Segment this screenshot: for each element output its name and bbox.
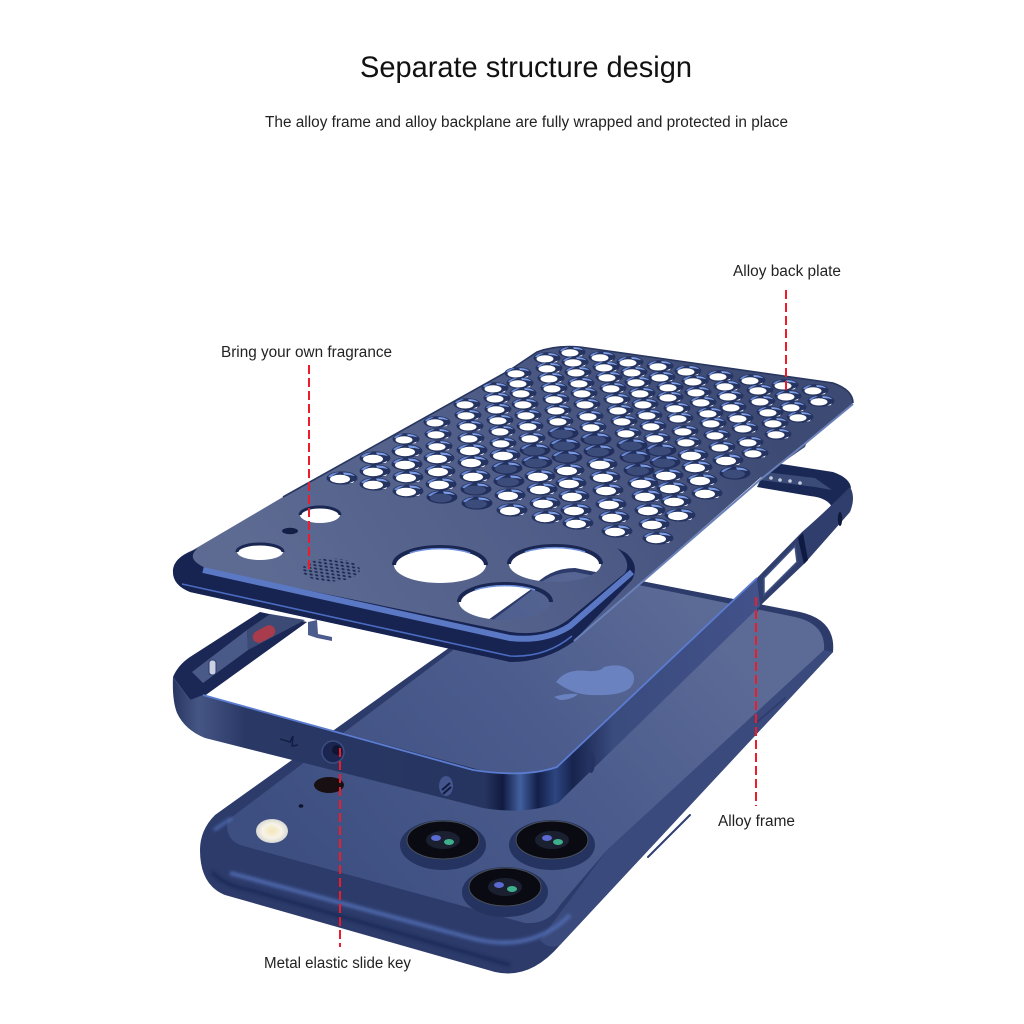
red mute button [251,623,277,645]
frame slot opening [764,546,797,595]
fragrance mesh [302,558,360,582]
frame etched mark [280,736,298,746]
frame left inner wall [173,612,307,700]
camera hole rims [394,546,601,602]
phone side buttons [648,658,785,857]
frame wall rear panel [192,630,248,683]
frame cut-out screw [439,776,453,796]
frame slot shadow [798,533,808,564]
alloy frame [173,463,853,811]
label: Metal elastic slide key [264,955,411,972]
label: Alloy back plate [733,263,841,280]
dashed line [755,597,757,806]
plate top edge [283,347,853,497]
microphone hole [314,777,344,793]
dashed line [308,365,310,570]
frame speaker dots [769,476,802,485]
frame right side hole [838,512,842,526]
alloy back plate [173,346,853,662]
phone rim highlights [212,818,570,965]
callout: alloy back plate [733,263,841,394]
plate long edge highlight [574,404,853,641]
dashed line [339,748,341,947]
apple logo [554,665,634,700]
frame top lighter strip [760,472,832,490]
frame wall button panel [247,614,305,650]
plate body with holes [173,347,853,662]
rim bright stripe [203,570,632,639]
small frame clip [308,620,332,641]
frame far corner inner wall [757,463,851,510]
phone outer shell [200,568,833,973]
plate face [173,347,853,662]
slide key button [322,741,344,763]
subtitle: The alloy frame and alloy backplane are fully wrapped and protected in place [265,114,788,131]
plate bottom rim [173,548,635,662]
small side hole on inner wall [209,660,216,675]
dashed line [785,290,787,394]
frame front band [173,578,760,811]
frame top highlight [203,578,757,773]
perforations [326,346,834,545]
lens 3 [462,867,548,917]
label: Alloy frame [718,813,795,830]
flash [256,819,288,843]
frame right side with slot [757,487,853,612]
title: Separate structure design [360,51,692,84]
small plate hole [282,528,298,534]
frame side port [587,751,595,773]
rim lower highlight [182,584,572,656]
phone glass back [227,572,824,923]
small hole rims [237,507,340,552]
phone body [200,568,833,973]
label: Bring your own fragrance [221,344,392,361]
lens 1 [400,820,486,870]
phone side face [540,650,833,947]
lens 2 [509,820,595,870]
small sensor dot [299,804,303,808]
